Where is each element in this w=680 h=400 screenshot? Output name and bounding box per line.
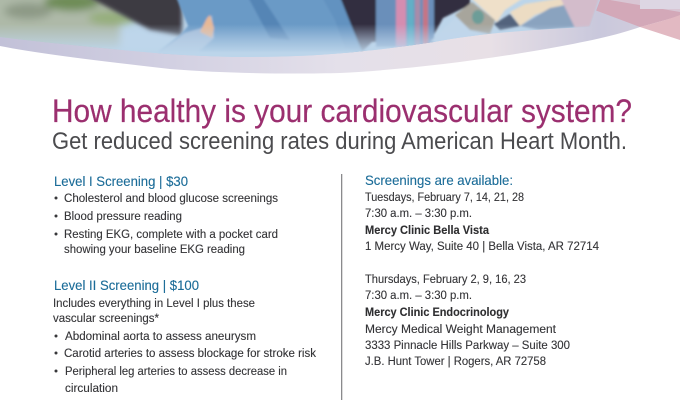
heading: level I: Level I Screening | $30 [54,173,188,189]
panel: screening schedule [365,172,599,368]
pink ribbon [568,0,680,40]
location: Bella Vista: 1 Mercy Way, Suite 40 | Bella Vista, AR 72714 [365,239,599,253]
bullet list: level II: Peripheral leg arteries to assess decrease in [65,364,287,378]
location: Bella Vista: Tuesdays, February 7, 14, 21, 28 [365,190,524,204]
location: Rogers: Mercy Medical Weight Management [365,322,557,336]
subtitle: Get reduced screening rates during American Heart Month. [52,128,627,155]
location: Bella Vista: 7:30 a.m. – 3:30 p.m. [365,206,472,220]
location: Rogers [365,272,570,368]
location: Rogers: Mercy Clinic Endocrinology [365,305,509,319]
location: Rogers: 7:30 a.m. – 3:30 p.m. [365,288,472,302]
intro text [53,296,255,325]
bullet list: level I [54,191,278,256]
heading: level II: Level II Screening | $100 [54,277,199,293]
location: Bella Vista [365,190,599,253]
bullet list: level I: showing your baseline EKG reading [64,242,245,256]
header photo with curved lower edge [0,0,680,74]
bullet list: level II: Abdominal aorta to assess aneurysm [65,329,256,343]
location: Rogers: Thursdays, February 2, 9, 16, 23 [365,272,526,286]
location: Bella Vista: Mercy Clinic Bella Vista [365,223,489,237]
bullet list: level II: circulation [65,381,118,395]
bullet list: level I: Blood pressure reading [64,209,182,223]
intro text: Includes everything in Level I plus these [53,296,255,310]
location: Rogers: J.B. Hunt Tower | Rogers, AR 72758 [365,354,546,368]
intro text: vascular screenings* [53,311,159,325]
panel: level I screening [54,173,278,256]
location: Rogers: 3333 Pinnacle Hills Parkway – Suite 300 [365,338,570,352]
bullet list: level II [54,329,317,395]
bullet list: level I: Cholesterol and blood glucose screenings [64,191,278,205]
bullet list: level I: Resting EKG, complete with a pocket card [64,227,278,241]
photo [0,0,600,57]
heading: screenings are available: Screenings are available: [365,172,513,188]
bullet list: level II: Carotid arteries to assess blockage for stroke risk [64,346,317,360]
title: How healthy is your cardiovascular system? [52,93,632,129]
lilac curved band [0,0,680,74]
panel: level II screening [53,277,317,395]
